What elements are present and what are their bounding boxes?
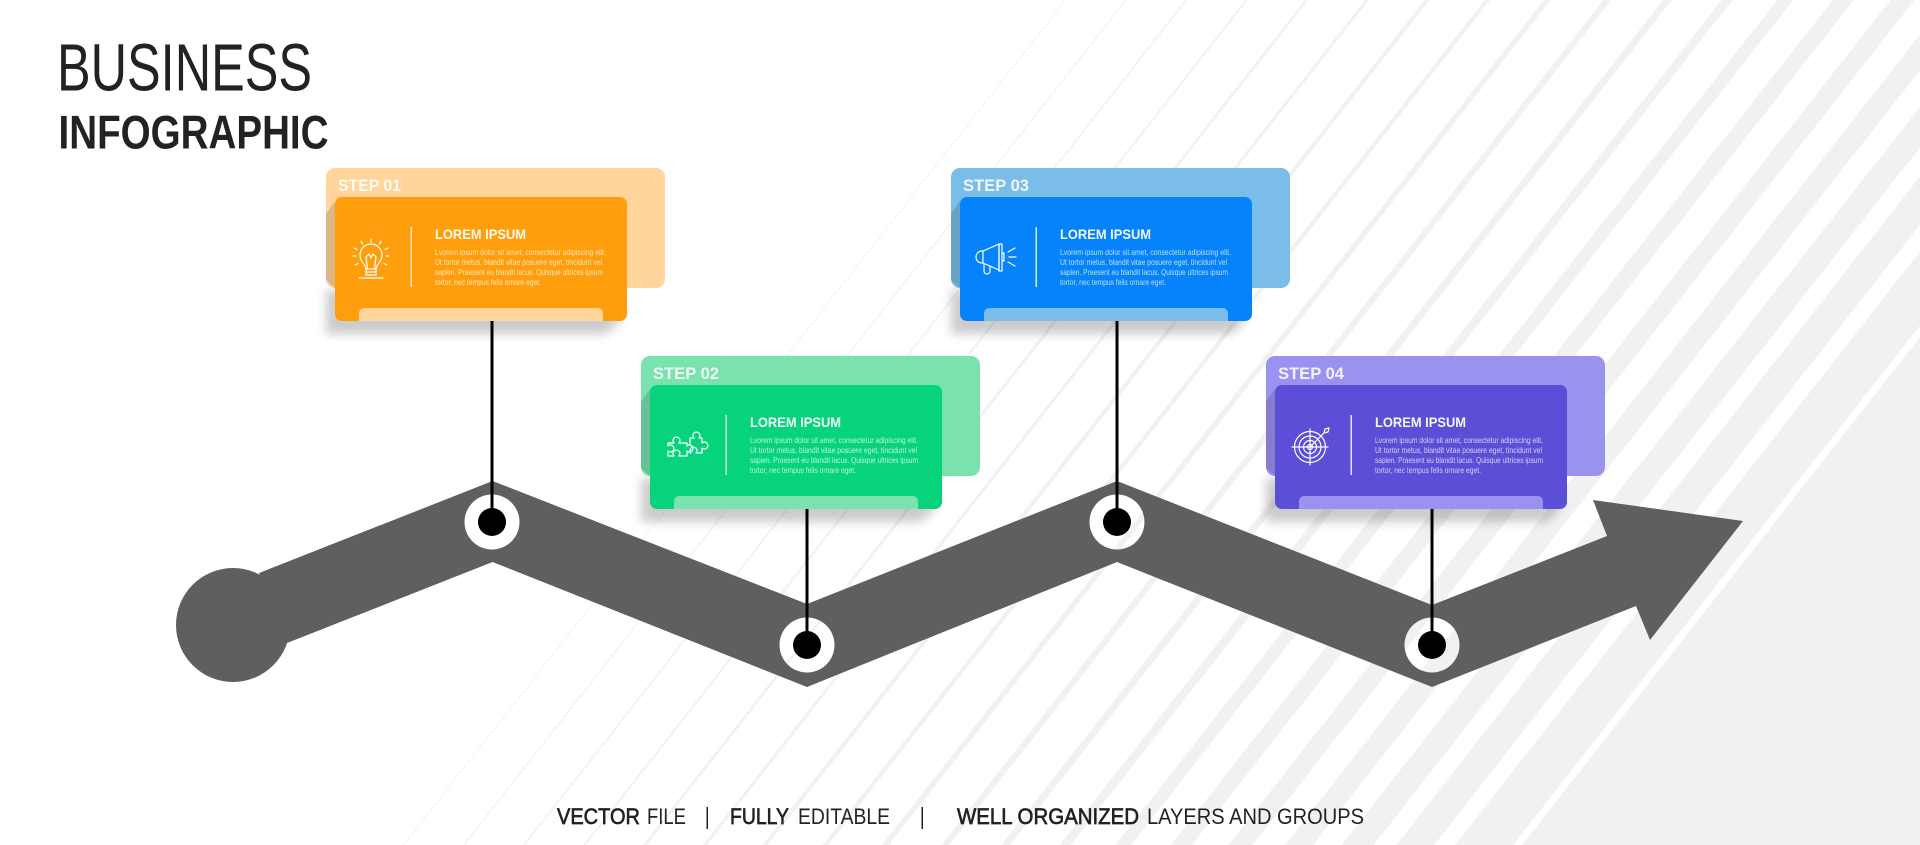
connector and node: step 02 (793, 509, 821, 659)
background: diagonal stripes (403, 0, 1920, 845)
heading: lorem ipsum 01: LOREM IPSUM (435, 226, 526, 242)
step label 01: STEP 01 (338, 176, 401, 195)
footer caption: FULLY (730, 804, 789, 829)
body text 01: sapien. Praesent eu blandit lacus. Quisque ultrices ipsum (435, 267, 603, 277)
footer caption: FILE (647, 804, 686, 829)
heading: lorem ipsum 03: LOREM IPSUM (1060, 226, 1151, 242)
step label 02: STEP 02 (653, 364, 719, 383)
body text 01 (435, 247, 606, 287)
body text 03: tortor, nec tempus felis ornare eget. (1060, 277, 1166, 287)
icon: puzzle pieces (668, 432, 708, 456)
zigzag timeline arrow (176, 481, 1743, 687)
title: BUSINESS: BUSINESS (57, 30, 312, 106)
body text 02: Lvorem ipsum dolor sit amet, consectetur adipiscing elit. (750, 435, 918, 445)
footer caption (557, 804, 1364, 829)
body text 02: Ut tortor metus, blandit vitae posuere eget, tincidunt vel (750, 445, 917, 455)
panel: step 01 (326, 168, 665, 334)
connector and node: step 04 (1418, 509, 1446, 659)
body text 03 (1060, 247, 1231, 287)
body text 02: tortor, nec tempus felis ornare eget. (750, 465, 856, 475)
body text 02 (750, 435, 918, 475)
step label 03: STEP 03 (963, 176, 1029, 195)
heading: lorem ipsum 02: LOREM IPSUM (750, 414, 841, 430)
title: INFOGRAPHIC: INFOGRAPHIC (58, 106, 328, 158)
connector and node: step 03 (1103, 321, 1131, 536)
footer caption: WELL ORGANIZED (957, 804, 1139, 829)
body text 04: sapien. Praesent eu blandit lacus. Quisque ultrices ipsum (1375, 455, 1543, 465)
icon: target with arrow (1292, 428, 1329, 465)
body text 01: tortor, nec tempus felis ornare eget. (435, 277, 541, 287)
body text 01: Lvorem ipsum dolor sit amet, consectetur adipiscing elit. (435, 247, 606, 257)
panel: step 04 (1266, 356, 1605, 522)
body text 01: Ut tortor metus, blandit vitae posuere eget, tincidunt vel (435, 257, 602, 267)
body text 04: Ut tortor metus, blandit vitae posuere eget, tincidunt vel (1375, 445, 1542, 455)
body text 04 (1375, 435, 1543, 475)
body text 03: Ut tortor metus, blandit vitae posuere eget, tincidunt vel (1060, 257, 1227, 267)
panel: step 02 (641, 356, 980, 522)
body text 04: tortor, nec tempus felis ornare eget. (1375, 465, 1481, 475)
body text 04: Lvorem ipsum dolor sit amet, consectetur adipiscing elit. (1375, 435, 1543, 445)
panel: step 03 (951, 168, 1290, 334)
connector and node: step 01 (478, 321, 506, 536)
footer caption: EDITABLE (798, 804, 890, 829)
icon: megaphone (976, 244, 1016, 274)
body text 03: Lvorem ipsum dolor sit amet, consectetur adipiscing elit. (1060, 247, 1231, 257)
body text 03: sapien. Praesent eu blandit lacus. Quisque ultrices ipsum (1060, 267, 1228, 277)
body text 02: sapien. Praesent eu blandit lacus. Quisque ultrices ipsum (750, 455, 918, 465)
icon: light bulb (353, 239, 389, 278)
heading: lorem ipsum 04: LOREM IPSUM (1375, 414, 1466, 430)
footer caption: LAYERS AND GROUPS (1147, 804, 1364, 829)
footer caption: VECTOR (557, 804, 640, 829)
step label 04: STEP 04 (1278, 364, 1345, 383)
